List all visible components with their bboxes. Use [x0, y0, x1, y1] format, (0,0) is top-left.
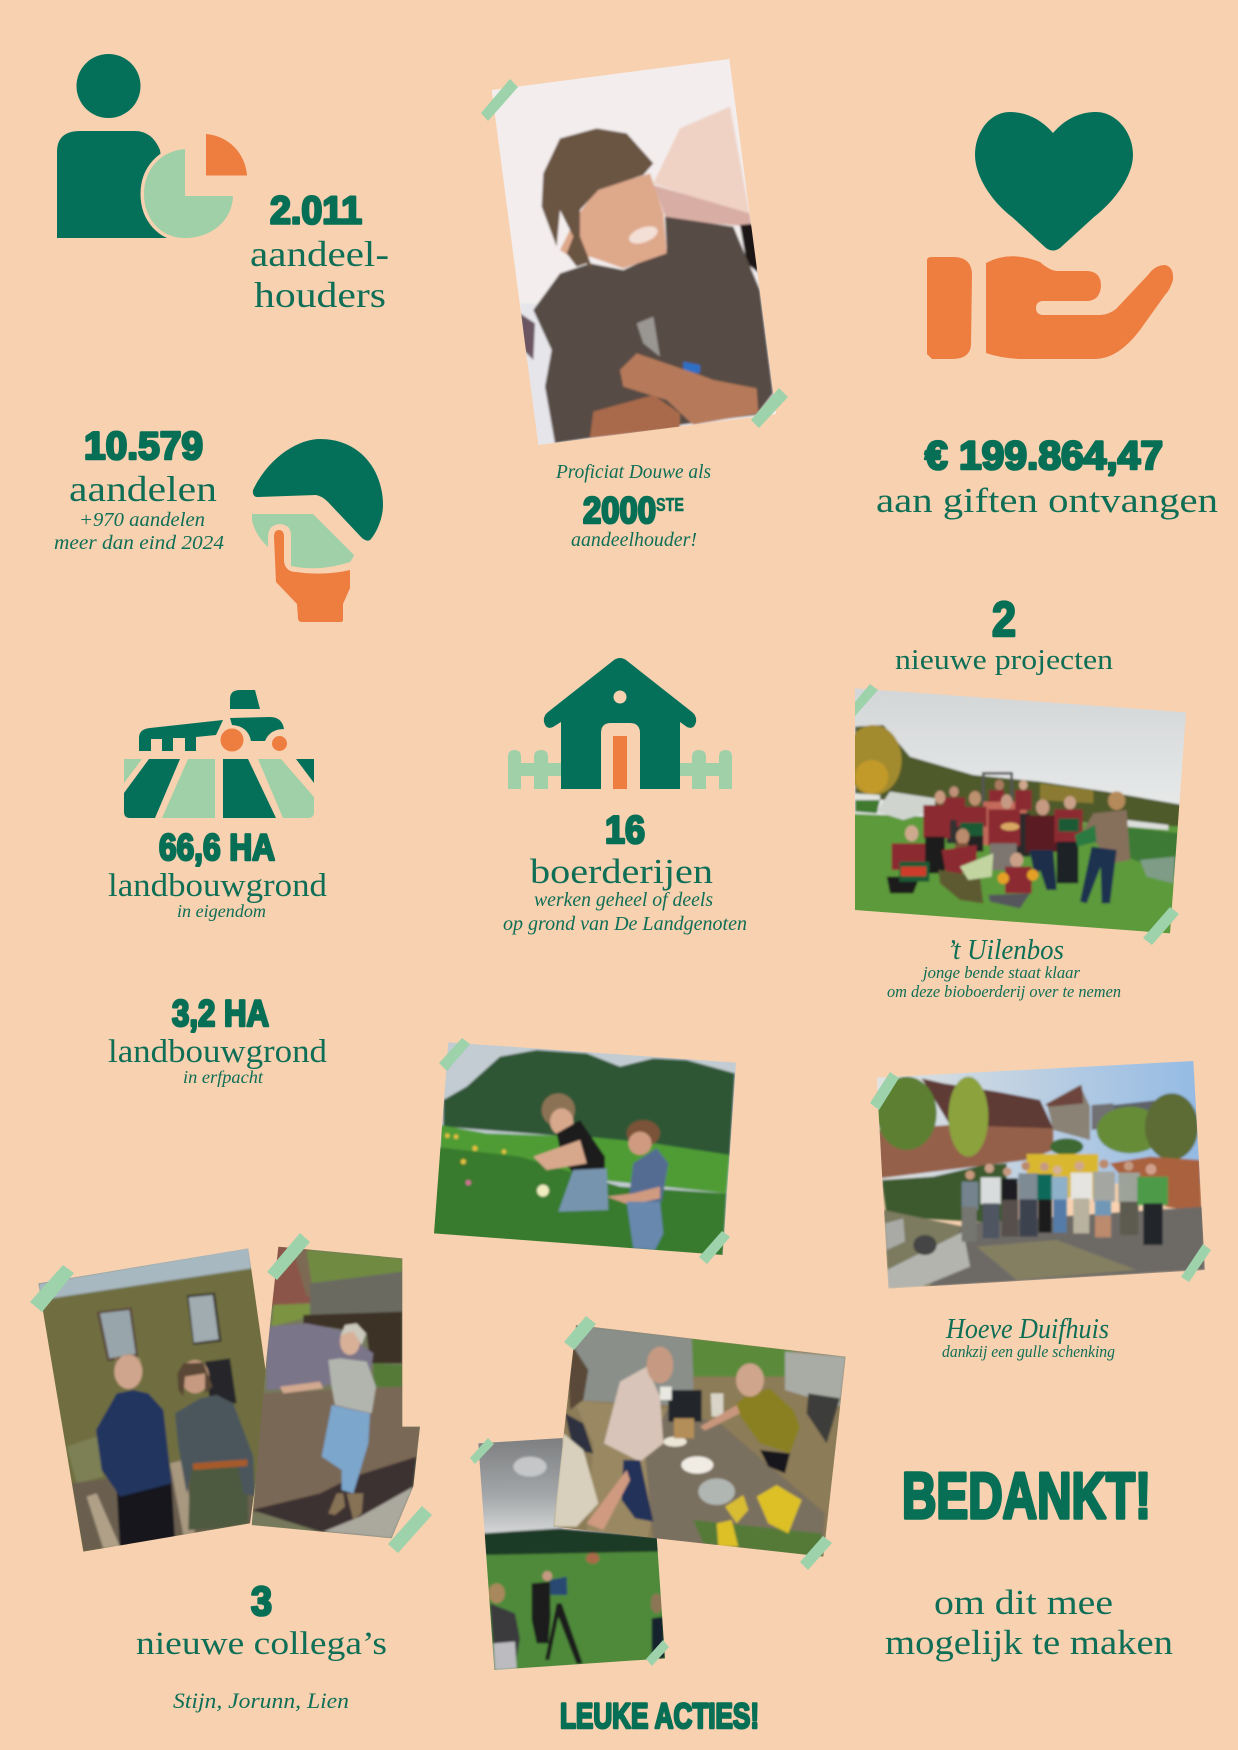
- stat: landbouwgrond erfpacht: [108, 993, 328, 1087]
- number: 2.011: 2.011: [270, 190, 362, 232]
- stat: boerderijen: op grond van De Landgenoten: [503, 913, 747, 935]
- tape: Hoeve Duifhuis photo: [870, 1072, 1211, 1282]
- note: werken geheel of deels: [534, 889, 713, 911]
- name: ’t Uilenbos: [947, 935, 1064, 966]
- number: amount: € 199.864,47: [925, 434, 1163, 478]
- stat: aandelen: [54, 425, 383, 622]
- text: om dit mee mogelijk te maken: om dit mee: [934, 1583, 1113, 1622]
- photo: Hoeve Duifhuis group: [876, 1061, 1205, 1288]
- stat: giften: [876, 434, 1218, 520]
- icon: farmhouse with fence: [508, 658, 732, 789]
- label: aandeel-houders: aandeel-: [250, 234, 389, 274]
- stat: nieuwe collega's: [136, 1578, 387, 1713]
- tape: Uilenbos photo: [855, 684, 1179, 945]
- heading: bedankt: BEDANKT!: [902, 1459, 1151, 1532]
- label: boerderijen: [530, 852, 713, 891]
- description: dankzij een gulle schenking: [942, 1342, 1115, 1361]
- closing: bedankt: mogelijk te maken: [885, 1623, 1173, 1662]
- caption: 2000ste aandeelhouder: [555, 461, 711, 551]
- icon: hand holding share: [252, 439, 383, 622]
- superscript: STE: STE: [656, 495, 684, 515]
- closing: bedankt: [885, 1459, 1173, 1662]
- label: landbouwgrond: [108, 868, 328, 904]
- tape: leuke acties photos: [470, 1316, 832, 1666]
- stat: aandeelhouders: [57, 54, 389, 315]
- number: 10.579: 10.579: [84, 425, 203, 468]
- photo: Douwe: [492, 59, 776, 445]
- icon: heart in hand: [927, 112, 1173, 359]
- icon: person with pie chart: [57, 54, 247, 238]
- number: 16: 16: [605, 809, 645, 852]
- stat: landbouwgrond eigendom: [108, 827, 328, 921]
- caption: Hoeve Duifhuis: [942, 1314, 1115, 1361]
- label: aan giften ontvangen: aan giften ontvangen: [876, 481, 1218, 520]
- photo: dahlia field: [434, 1042, 736, 1255]
- photo: meadow with camera: [473, 1437, 673, 1673]
- number: 3: 3: [251, 1578, 272, 1624]
- number: 66,6 HA: 66,6 HA: [159, 827, 275, 868]
- description: jonge bende staat klaar: [921, 963, 1081, 982]
- name: Hoeve Duifhuis: [945, 1314, 1109, 1345]
- caption: Uilenbos: [887, 935, 1121, 1001]
- caption: Uilenbos: om deze bioboerderij over te nemen: [887, 982, 1121, 1001]
- number: 3,2 HA: 3,2 HA: [172, 993, 269, 1034]
- stat: boerderijen: [503, 809, 747, 935]
- photo: tasting table: [550, 1323, 850, 1563]
- tape: Douwe photo: [481, 79, 788, 428]
- icon: tractor on field: [124, 690, 314, 818]
- photo: Uilenbos team: [855, 688, 1186, 934]
- text: proficiat: Proficiat Douwe als: [555, 461, 711, 483]
- number: 2: 2: [992, 593, 1016, 647]
- stat: aandeelhouders: houders: [254, 275, 386, 315]
- label: nieuwe projecten: [895, 644, 1114, 676]
- heading: leuke acties: LEUKE ACTIES!: [560, 1697, 759, 1736]
- photo: Jorunn and Stijn: [38, 1248, 266, 1552]
- number: 2000: 2000: [583, 490, 656, 531]
- label: aandelen: aandelen: [69, 469, 217, 509]
- tape: dahlia photo: [439, 1038, 730, 1264]
- label: landbouwgrond: [108, 1034, 328, 1070]
- names: Stijn, Jorunn, Lien: [173, 1688, 349, 1713]
- stat: nieuwe projecten: [895, 593, 1114, 676]
- text: aandeelhouder: aandeelhouder!: [571, 529, 697, 551]
- photo: Lien: [250, 1243, 427, 1543]
- note: in erfpacht: [183, 1067, 264, 1087]
- note: extra aandelen: +970 aandelen: [79, 509, 205, 531]
- stat: aandelen: meer dan eind 2024: [54, 532, 224, 554]
- label: nieuwe collega’s: [136, 1626, 387, 1662]
- tape: collega's photos: [30, 1233, 432, 1553]
- note: in eigendom: [177, 901, 266, 921]
